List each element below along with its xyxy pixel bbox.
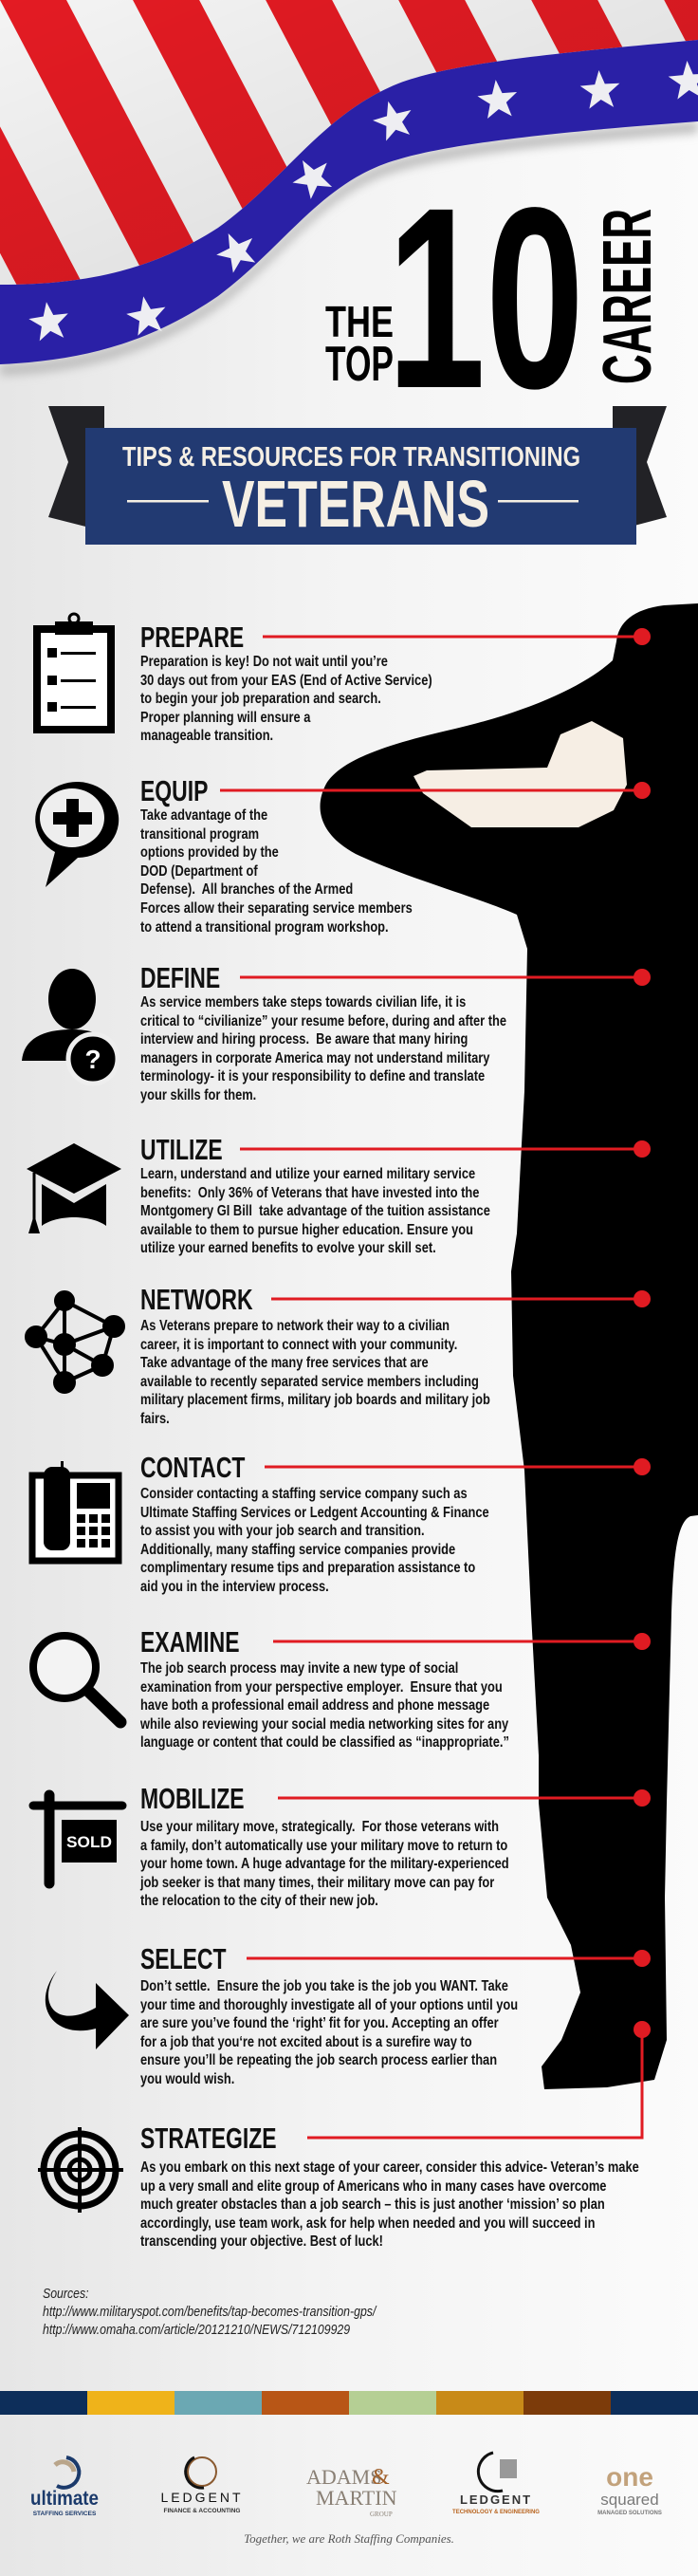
- text: strategize: As you embark on this next stage of your career, consider this advice- Veteran’s make: [140, 2159, 639, 2176]
- icon: clipboard: [37, 614, 111, 730]
- section: select: SELECT: [140, 1942, 226, 1975]
- tagline: Together, we are Roth Staffing Companies.: [244, 2531, 454, 2546]
- icon: person with question mark: [22, 969, 118, 1084]
- sources: Sources:: [43, 2286, 89, 2302]
- text: define: terminology- it is your responsibility to define and translate: [140, 1068, 485, 1084]
- text: equip: Take advantage of the: [140, 807, 267, 824]
- text: mobilize: your home town. A huge advantage for the military-experienced: [140, 1856, 509, 1872]
- text: prepare: Preparation is key! Do not wait until you’re: [140, 654, 388, 670]
- text: strategize: accordingly, use team work, ask for help when needed and you will succeed in: [140, 2215, 595, 2232]
- banner ribbon: TIPS & RESOURCES FOR TRANSITIONING: [122, 442, 580, 473]
- text: strategize: up a very small and elite group of Americans who in many cases have overcome: [140, 2178, 606, 2195]
- text: utilize: benefits: Only 36% of Veterans that have invested into the: [140, 1185, 479, 1201]
- text: network: [140, 1318, 490, 1427]
- section: contact: CONTACT: [140, 1451, 245, 1484]
- text: strategize: transcending your objective. Best of luck!: [140, 2233, 383, 2250]
- section: network: NETWORK: [140, 1283, 253, 1316]
- text: select: for a job that you‘re not excited about is a surefire way to: [140, 2034, 472, 2050]
- logos: MANAGED SOLUTIONS: [597, 2511, 662, 2516]
- text: utilize: utilize your earned benefits to evolve your skill set.: [140, 1240, 436, 1256]
- icon: magnifier: [33, 1636, 120, 1722]
- text: mobilize: the relocation to the city of their new job.: [140, 1893, 378, 1909]
- icon: speech bubble plus: [35, 782, 119, 887]
- text: examine: examination from your perspective employer. Ensure that you: [140, 1679, 503, 1696]
- sources: http://www.omaha.com/article/20121210/NEWS/712109929: [43, 2322, 350, 2338]
- logos: FINANCE & ACCOUNTING: [163, 2508, 241, 2514]
- text: network: available to recently separated service members including: [140, 1374, 479, 1390]
- text: define: managers in corporate America may not understand military: [140, 1050, 489, 1066]
- section: prepare: PREPARE: [140, 621, 244, 654]
- text: define: [140, 994, 506, 1103]
- text: network: fairs.: [140, 1411, 170, 1427]
- text: utilize: Learn, understand and utilize your earned military service: [140, 1166, 475, 1182]
- logos: STAFFING SERVICES: [33, 2511, 97, 2517]
- logos: LEDGENT: [160, 2490, 244, 2505]
- section: equip: EQUIP: [140, 774, 208, 807]
- section: examine: EXAMINE: [140, 1625, 240, 1659]
- title: the top 10 career: 10: [387, 154, 584, 442]
- section: define: DEFINE: [140, 961, 220, 994]
- text: prepare: to begin your job preparation and search.: [140, 691, 381, 707]
- text: select: [140, 1978, 518, 2087]
- text: equip: options provided by the: [140, 844, 279, 861]
- text: utilize: available to them to pursue higher education. Ensure you: [140, 1222, 473, 1238]
- banner ribbon: VETERANS: [222, 467, 489, 541]
- text: prepare: Proper planning will ensure a: [140, 710, 310, 726]
- text: examine: while also reviewing your social media networking sites for any: [140, 1716, 508, 1733]
- text: mobilize: [140, 1819, 509, 1909]
- text: examine: [140, 1660, 509, 1751]
- text: contact: Ultimate Staffing Services or Ledgent Accounting & Finance: [140, 1505, 489, 1521]
- text: prepare: [140, 654, 432, 744]
- silhouette: saluting soldier: [321, 603, 698, 2089]
- text: equip: [140, 807, 413, 936]
- text: select: are sure you’ve found the ‘right’ fit for you. Accepting an offer: [140, 2015, 499, 2031]
- logos: ADAMS: [306, 2465, 381, 2489]
- sources: [43, 2286, 377, 2338]
- text: select: you would wish.: [140, 2071, 234, 2087]
- text: utilize: Montgomery GI Bill take advantage of the tuition assistance: [140, 1203, 490, 1219]
- logos: squared: [600, 2491, 659, 2509]
- icon: sold sign: SOLD: [66, 1833, 112, 1851]
- text: define: interview and hiring process. Be aware that many hiring: [140, 1031, 468, 1047]
- flag band shadow: [0, 121, 698, 376]
- text: equip: DOD (Department of: [140, 863, 258, 880]
- text: contact: Additionally, many staffing service companies provide: [140, 1542, 455, 1558]
- text: equip: Defense). All branches of the Armed: [140, 881, 353, 898]
- text: select: ensure you’ll be repeating the job search process earlier than: [140, 2052, 497, 2068]
- text: select: Don’t settle. Ensure the job you take is the job you WANT. Take: [140, 1978, 508, 1994]
- title: the top 10 career: THE: [325, 297, 394, 346]
- text: equip: to attend a transitional program workshop.: [140, 919, 389, 936]
- text: mobilize: Use your military move, strategically. For those veterans with: [140, 1819, 499, 1835]
- text: define: As service members take steps towards civilian life, it is: [140, 994, 466, 1010]
- flag stripes: [0, 0, 698, 285]
- icon: person with question mark: ?: [84, 1045, 101, 1074]
- icon: sold sign: [33, 1795, 122, 1883]
- text: contact: aid you in the interview process.: [140, 1579, 329, 1595]
- icon: graduation cap: [27, 1143, 121, 1233]
- text: contact: [140, 1486, 489, 1595]
- logos: GROUP: [370, 2511, 393, 2518]
- icon: target: [38, 2127, 123, 2213]
- icon: curved arrow: [46, 1971, 129, 2049]
- logos: one: [606, 2462, 653, 2492]
- section: mobilize: MOBILIZE: [140, 1782, 245, 1815]
- logos: MARTIN: [316, 2486, 397, 2510]
- flag blue star band: [0, 40, 698, 364]
- logos: TECHNOLOGY & ENGINEERING: [452, 2510, 540, 2515]
- title: the top 10 career: CAREER: [590, 209, 666, 384]
- sources: http://www.militaryspot.com/benefits/tap-becomes-transition-gps/: [43, 2304, 376, 2320]
- logos: ultimate: [30, 2488, 99, 2510]
- connector lines and dots: [220, 628, 651, 2138]
- section: strategize: STRATEGIZE: [140, 2122, 277, 2155]
- text: prepare: manageable transition.: [140, 728, 273, 744]
- text: select: your time and thoroughly investigate all of your options until you: [140, 1997, 518, 2013]
- logos: LEDGENT: [460, 2493, 532, 2507]
- icon: desk phone: [32, 1461, 119, 1561]
- footer colour stripe: [0, 2391, 698, 2415]
- text: network: career, it is important to connect with your community.: [140, 1337, 457, 1353]
- section: utilize: UTILIZE: [140, 1133, 223, 1166]
- text: examine: The job search process may invite a new type of social: [140, 1660, 458, 1677]
- text: network: military placement firms, military job boards and military job: [140, 1392, 490, 1408]
- logos: &: [372, 2465, 390, 2490]
- banner ribbon: [48, 406, 667, 545]
- text: mobilize: a family, don’t automatically use your military move to return to: [140, 1838, 507, 1854]
- text: contact: complimentary resume tips and preparation assistance to: [140, 1560, 475, 1576]
- text: utilize: [140, 1166, 490, 1256]
- logos: [30, 2453, 662, 2518]
- text: contact: Consider contacting a staffing service company such as: [140, 1486, 468, 1502]
- text: prepare: 30 days out from your EAS (End of Active Service): [140, 673, 432, 689]
- text: equip: Forces allow their separating service members: [140, 900, 413, 917]
- text: network: As Veterans prepare to network their way to a civilian: [140, 1318, 450, 1334]
- icon: network: [27, 1292, 123, 1392]
- text: equip: transitional program: [140, 826, 259, 843]
- text: examine: have both a professional email address and phone message: [140, 1697, 489, 1714]
- text: define: critical to “civilianize” your resume before, during and after the: [140, 1013, 506, 1029]
- text: contact: to assist you with your job search and transition.: [140, 1523, 425, 1539]
- text: network: Take advantage of the many free services that are: [140, 1355, 429, 1371]
- title: the top 10 career: TOP: [325, 337, 394, 392]
- text: strategize: much greater obstacles than a job search – this is just another ‘mission’ so plan: [140, 2196, 605, 2213]
- text: define: your skills for them.: [140, 1087, 256, 1103]
- text: strategize: [140, 2159, 639, 2250]
- text: mobilize: job seeker is that many times, their military move can pay for: [140, 1875, 494, 1891]
- text: examine: language or content that could be classified as “inappropriate.”: [140, 1734, 509, 1751]
